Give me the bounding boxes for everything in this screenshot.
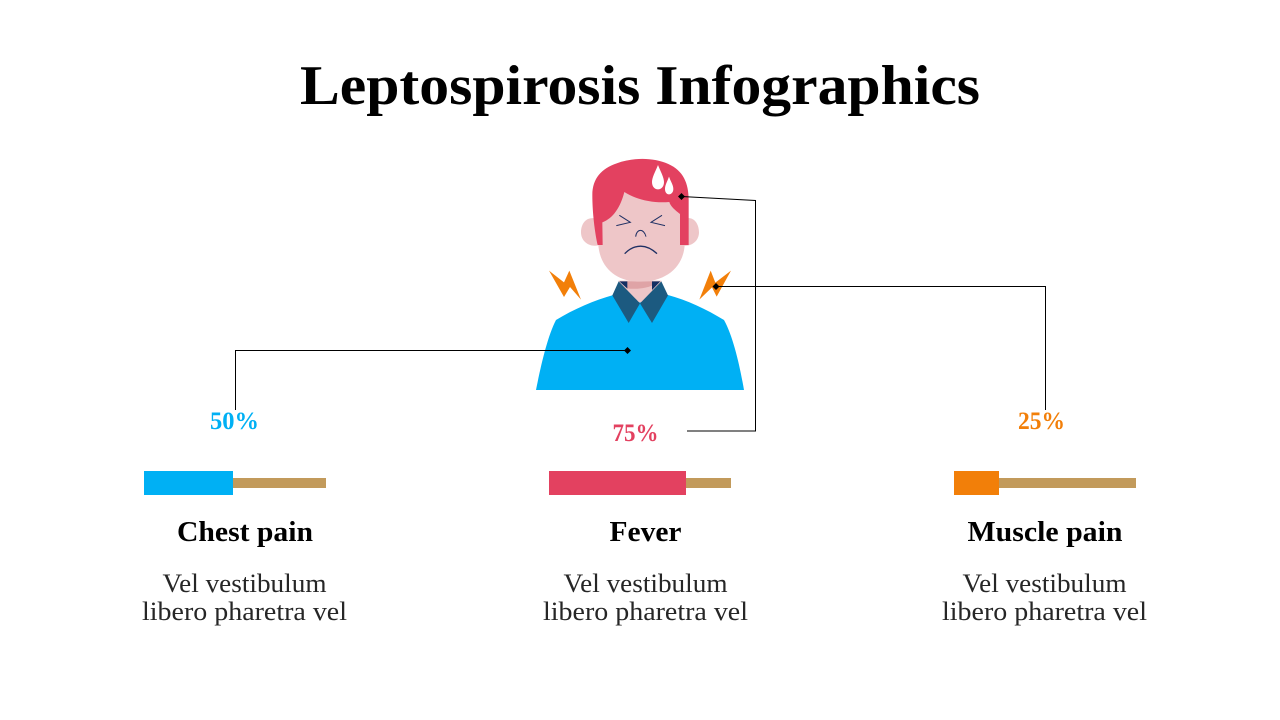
connector: muscle pain xyxy=(716,286,1046,410)
neck xyxy=(619,281,661,303)
percentage: 50% xyxy=(210,408,259,435)
eyes xyxy=(616,215,665,226)
percentage: 75% xyxy=(612,420,658,447)
nose xyxy=(636,230,646,237)
neck shadow xyxy=(627,281,653,289)
title: Leptospirosis Infographics xyxy=(300,55,980,117)
description: Vel vestibulum xyxy=(962,569,1126,598)
description xyxy=(942,569,1147,626)
ears xyxy=(581,218,699,246)
description: Vel vestibulum xyxy=(564,569,728,598)
connector: chest pain xyxy=(236,350,627,410)
illustration: sick person xyxy=(536,159,744,390)
panel: fever xyxy=(543,420,748,626)
description: libero pharetra vel xyxy=(942,597,1147,626)
description: libero pharetra vel xyxy=(543,597,748,626)
progress bar xyxy=(954,471,1136,495)
description: libero pharetra vel xyxy=(142,597,347,626)
sweat drops xyxy=(652,165,673,194)
collar xyxy=(612,281,668,323)
description xyxy=(543,569,748,626)
description: Vel vestibulum xyxy=(162,569,326,598)
percentage: 25% xyxy=(1018,408,1065,435)
face xyxy=(597,190,685,282)
connector: fever xyxy=(682,196,756,431)
shirt xyxy=(536,295,744,390)
marker dots xyxy=(624,193,720,354)
lightning bolts xyxy=(549,271,731,300)
description xyxy=(142,569,347,626)
panel: muscle pain xyxy=(942,408,1147,626)
hair xyxy=(592,159,689,245)
mouth xyxy=(625,246,657,254)
heading: Chest pain xyxy=(177,517,313,548)
collar inner xyxy=(619,281,660,290)
heading: Fever xyxy=(610,517,682,548)
panel: chest pain xyxy=(142,408,347,626)
heading: Muscle pain xyxy=(968,517,1123,548)
progress bar xyxy=(144,471,326,495)
progress bar xyxy=(549,471,731,495)
